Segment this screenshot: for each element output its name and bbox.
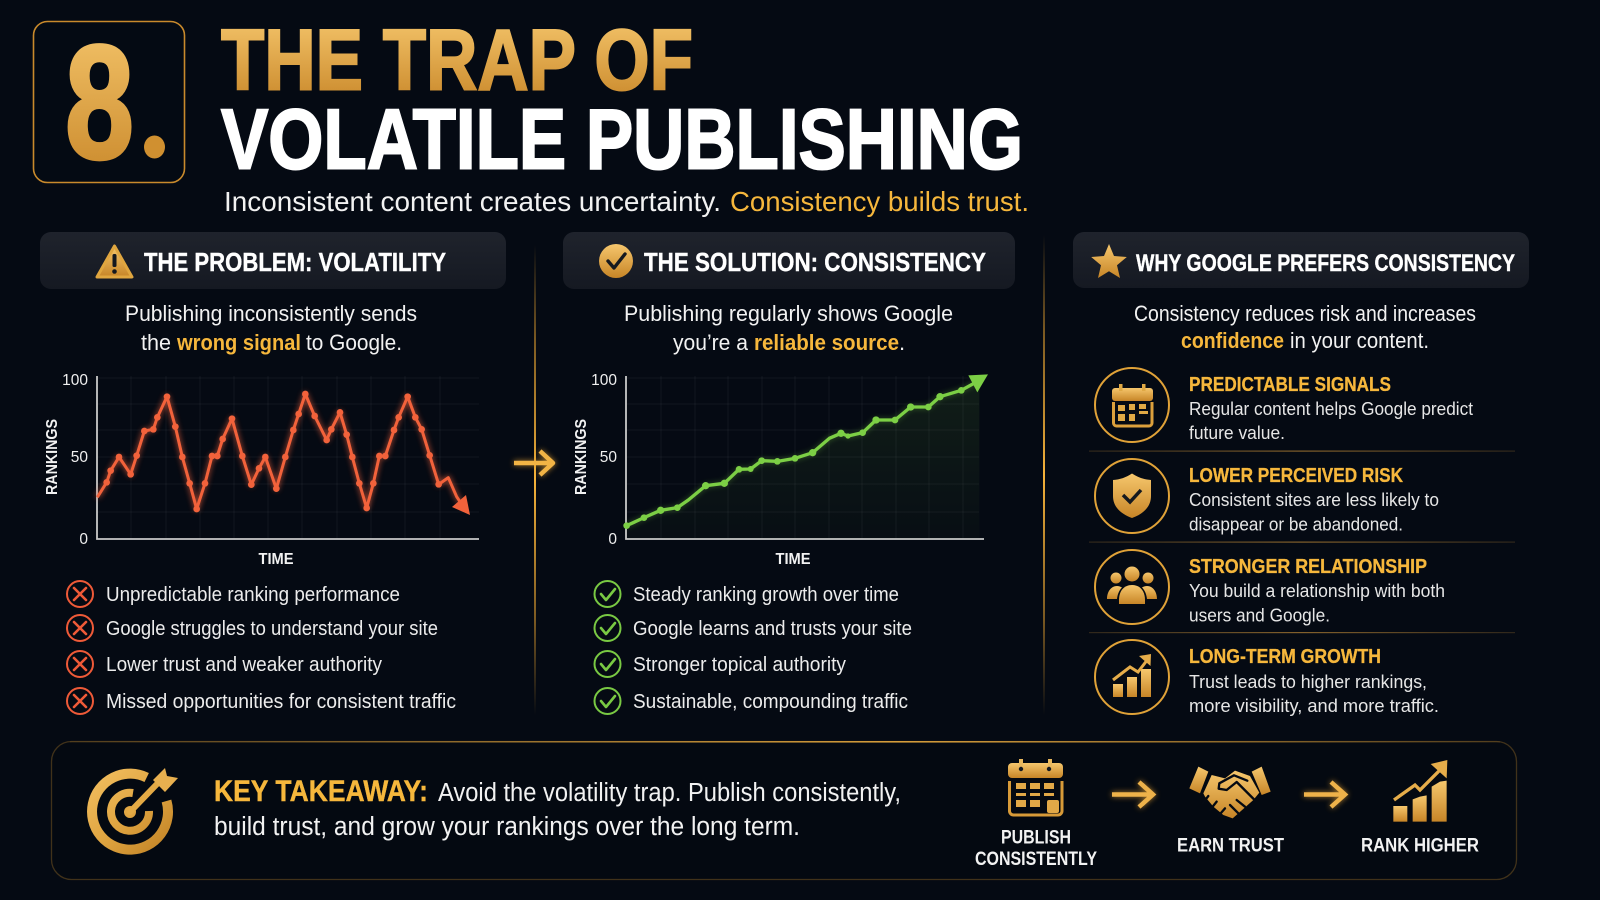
item description: more visibility, and more traffic. [1189,695,1439,716]
item description: Consistent sites are less likely to [1189,489,1439,510]
flow step: publish consistently [975,759,1097,870]
icon: target [92,768,178,850]
problem list [67,581,456,714]
item description: Regular content helps Google predict [1189,398,1473,419]
solution intro: you’re a [673,330,749,355]
item description: users and Google. [1189,604,1330,626]
flow step: rank higher [1361,760,1479,856]
title: VOLATILE PUBLISHING [221,92,1023,188]
solution list: Steady ranking growth over time [633,584,899,606]
why intro: in your content. [1290,328,1429,353]
chart: volatile rankings: 50 [71,449,88,466]
problem list: Missed opportunities for consistent traffic [106,691,456,713]
problem list: Google struggles to understand your site [106,618,438,640]
step label: EARN TRUST [1177,836,1284,856]
item description: You build a relationship with both [1189,580,1445,601]
number badge [34,12,184,193]
flow step: earn trust [1177,767,1284,856]
chart: volatile rankings: TIME [258,551,294,568]
item: long-term growth [1095,640,1439,716]
solution list: Google learns and trusts your site [633,618,912,640]
item description: future value. [1189,422,1285,443]
chart: steady rankings: 0 [608,531,617,548]
item description [1189,671,1439,716]
icon: calendar [1095,368,1169,442]
problem header bar [40,232,506,289]
takeaway text [214,775,901,841]
why intro: confidence [1181,328,1284,353]
item: predictable signals [1095,368,1473,443]
solution list: Stronger topical authority [633,654,846,676]
chart: volatile rankings [44,372,479,568]
takeaway text: KEY TAKEAWAY: [214,775,428,808]
chart: steady rankings [573,372,988,568]
item: stronger relationship [1095,550,1445,626]
step label: RANK HIGHER [1361,836,1479,856]
chart: steady rankings: 100 [591,372,617,389]
solution intro: Publishing regularly shows Google [624,301,953,326]
item description: Trust leads to higher rankings, [1189,671,1427,692]
problem intro: to Google. [306,330,402,355]
problem header bar: THE PROBLEM: VOLATILITY [144,249,446,277]
problem list: Unpredictable ranking performance [106,584,400,606]
panel: why google prefers consistency [1073,232,1529,716]
arrow: trust to rank [1304,782,1345,807]
icon: calendar [1008,759,1063,815]
item description [1189,398,1473,443]
solution list [594,581,912,714]
chart: steady rankings: TIME [776,551,810,568]
why intro: Consistency reduces risk and increases [1134,301,1476,326]
problem intro: Publishing inconsistently sends [125,301,417,326]
divider arrow: problem to solution [514,245,553,715]
icon: shield [1095,459,1169,533]
chart: volatile rankings: RANKINGS [44,419,61,495]
chart: volatile rankings: 100 [62,372,88,389]
icon: growth chart [1095,640,1169,714]
chart: volatile rankings: 0 [79,531,88,548]
title [221,12,1023,188]
problem intro: wrong signal [176,330,301,355]
icon: handshake [1189,767,1271,818]
solution list: Sustainable, compounding traffic [633,691,908,713]
item description [1189,489,1439,534]
chart: steady rankings: 50 [600,449,617,466]
solution intro: . [899,330,905,355]
solution intro [624,301,953,355]
takeaway text: Avoid the volatility trap. Publish consistently, [438,779,901,807]
step label [975,828,1097,870]
why intro [1134,301,1476,353]
chart: steady rankings: RANKINGS [573,419,590,495]
icon: people [1095,550,1169,624]
item description [1189,580,1445,626]
why header bar: WHY GOOGLE PREFERS CONSISTENCY [1136,250,1515,277]
why header bar [1073,232,1529,288]
subtitle: Inconsistent content creates uncertainty. [224,186,721,217]
subtitle: Consistency builds trust. [730,186,1029,217]
item: lower perceived risk [1095,459,1439,534]
subtitle [224,186,1029,217]
panel: the problem [40,232,506,714]
solution header bar [563,232,1015,289]
step label: CONSISTENTLY [975,849,1097,870]
step label: PUBLISH [1001,828,1071,848]
item heading: LONG-TERM GROWTH [1189,646,1381,668]
panel: the solution [563,232,1015,714]
problem intro: the [141,330,171,355]
solution intro: reliable source [754,330,899,355]
icon: growth chart [1393,760,1447,822]
item description: disappear or be abandoned. [1189,514,1403,534]
problem list: Lower trust and weaker authority [106,654,382,676]
panel: key takeaway [52,741,1516,880]
item heading: LOWER PERCEIVED RISK [1189,465,1403,487]
problem intro [125,301,417,355]
item heading: STRONGER RELATIONSHIP [1189,556,1427,578]
arrow: publish to trust [1112,782,1153,807]
item heading: PREDICTABLE SIGNALS [1189,374,1391,396]
takeaway text: build trust, and grow your rankings over the long term. [214,813,800,841]
number badge: 8 [65,12,134,193]
solution header bar: THE SOLUTION: CONSISTENCY [644,249,986,277]
title: THE TRAP OF [221,12,693,108]
